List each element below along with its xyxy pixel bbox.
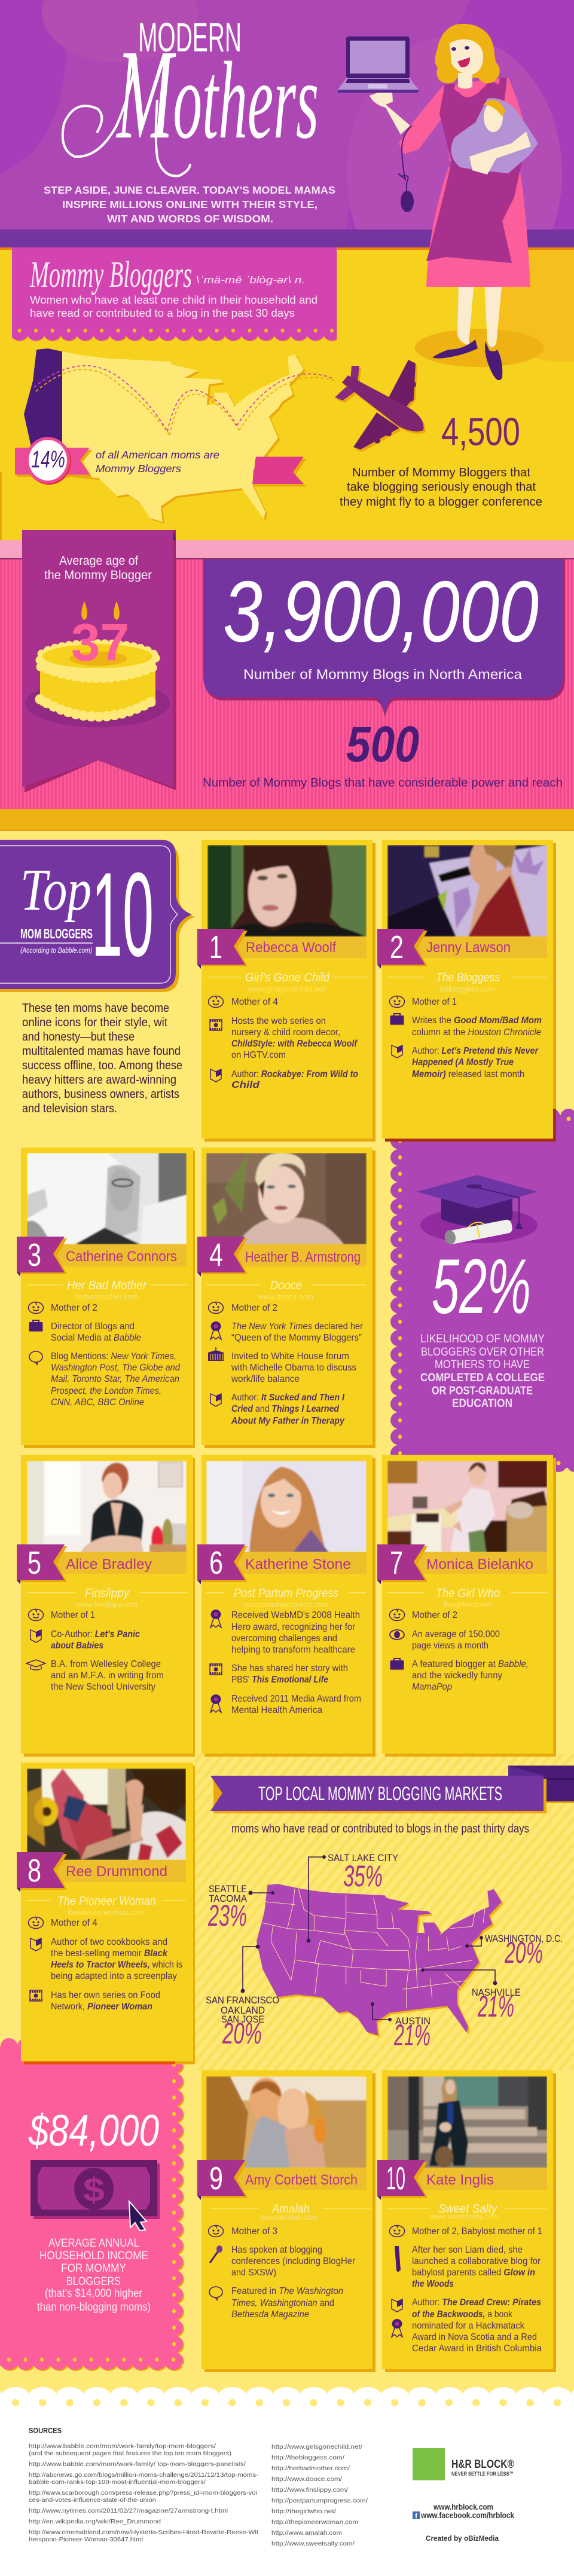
card 2: Jenny Lawson: Mother of 1 bbox=[412, 997, 457, 1007]
sources column right: http://thepioneerwoman.com bbox=[271, 2519, 358, 2526]
tagline: STEP ASIDE, JUNE CLEAVER. TODAY'S MODEL MAMAS bbox=[44, 184, 335, 196]
white footer with scalloped edge bbox=[0, 2385, 574, 2576]
cake with 37 bbox=[25, 601, 170, 727]
title: Modern Mothers bbox=[63, 14, 319, 176]
card 6: Katherine Stone: Katherine Stone bbox=[245, 1556, 351, 1572]
card 9: Amy Corbett Storch: conferences (including BlogHer bbox=[231, 2256, 355, 2266]
market: San Francisco Oakland San Jose: OAKLAND bbox=[221, 2005, 265, 2016]
card 6: Katherine Stone: overcoming challenges and bbox=[231, 1633, 337, 1644]
market: Washington D.C. bbox=[465, 1933, 563, 1969]
sources column right: http://www.girlsgonechild.net/ bbox=[271, 2443, 362, 2450]
market: Austin: AUSTIN bbox=[395, 2015, 430, 2027]
card 5: Alice Bradley: Finslippy bbox=[85, 1587, 130, 1600]
intro paragraph: and television stars. bbox=[22, 1102, 117, 1115]
intro paragraph: online icons for their style, wit bbox=[22, 1016, 167, 1029]
market: San Francisco Oakland San Jose bbox=[206, 1945, 279, 2050]
bookmark: average age: Average age of bbox=[59, 554, 138, 568]
definition panel: Mommy Bloggers: \ˈmä-mē ˈblȯg-ər\ n. bbox=[196, 274, 305, 286]
card 10: Kate Inglis: Award in Nova Scotia and a Red bbox=[412, 2332, 537, 2342]
photo: Alice Bradley bbox=[27, 1461, 187, 1552]
speech bubble: 3,900,000 bbox=[203, 559, 565, 717]
card 8: Ree Drummond: the best-selling memoir Black bbox=[51, 1948, 168, 1959]
market: San Francisco Oakland San Jose: 20% bbox=[222, 2017, 262, 2050]
callout: 14 percent: 14% bbox=[31, 446, 65, 473]
sources column left: herspoon-Pioneer-Woman-30647.html bbox=[29, 2536, 143, 2543]
card 1: Rebecca Woolf: Hosts the web series on bbox=[231, 1016, 326, 1026]
photo: Jenny Lawson bbox=[387, 845, 547, 937]
market: Salt Lake City bbox=[306, 1852, 398, 1942]
photo: Rebecca Woolf bbox=[207, 845, 367, 937]
card 2: Jenny Lawson: thebloggess.com bbox=[439, 984, 495, 993]
card 6: Katherine Stone: helping to transform healthcare bbox=[231, 1645, 355, 1655]
card 4: Heather B. Armstrong bbox=[197, 1148, 375, 1448]
card 8: Ree Drummond: 8 bbox=[28, 1853, 41, 1889]
card 6: Katherine Stone bbox=[197, 1455, 375, 1757]
card 8: Ree Drummond: Has her own series on Food bbox=[51, 1990, 160, 2000]
footer links: Created by oBizMedia bbox=[426, 2534, 499, 2543]
icon: graduation cap bbox=[417, 1175, 538, 1246]
card 1: Rebecca Woolf: Girl's Gone Child bbox=[245, 971, 330, 984]
title: Modern Mothers: MODERN bbox=[138, 14, 242, 60]
card 10: Kate Inglis: Author: The Dread Crew: Pirates bbox=[412, 2297, 541, 2308]
card 7: Monica Bielanko: Mother of 2 bbox=[412, 1610, 457, 1620]
yellow section background bbox=[0, 247, 574, 540]
card 10: Kate Inglis: nominated for a Hackmatack bbox=[412, 2321, 524, 2331]
footer links: www.hrblock.com bbox=[433, 2502, 493, 2511]
card 1: Rebecca Woolf: www.girlsgonechild.net bbox=[248, 984, 325, 993]
card 8: Ree Drummond: thepioneerwoman.com bbox=[68, 1908, 145, 1917]
card 8: Ree Drummond: The Pioneer Woman bbox=[57, 1895, 156, 1908]
footer links bbox=[413, 2502, 514, 2543]
sources column right: http://postpartumprogress.com/ bbox=[271, 2497, 368, 2504]
sources column left: (and the subsequent pages that features the top ten mom bloggers) bbox=[29, 2450, 231, 2457]
sources column left: http://abcnews.go.com/blogs/million-moms-challenge/2011/12/13/top-moms- bbox=[29, 2471, 259, 2479]
logo: H&R Block bbox=[413, 2448, 514, 2480]
logo: H&R Block: H&R BLOCK® bbox=[451, 2458, 514, 2471]
card 4: Heather B. Armstrong: About My Father in Therapy bbox=[231, 1416, 345, 1426]
card 5: Alice Bradley: and an M.F.A. in writing from bbox=[51, 1671, 164, 1681]
bookmark: average age bbox=[22, 530, 176, 793]
card 7: Monica Bielanko bbox=[377, 1455, 556, 1757]
card 10: Kate Inglis: Mother of 2, Babylost mother of 1 bbox=[412, 2226, 542, 2237]
stat: 4,500: take blogging seriously enough that bbox=[347, 480, 536, 494]
card 3: Catherine Connors: Catherine Connors bbox=[66, 1249, 177, 1265]
market: Seattle Tacoma: SEATTLE bbox=[209, 1883, 247, 1895]
card 7: Monica Bielanko: 7 bbox=[390, 1545, 403, 1581]
sources column right: http://www.sweetsalty.com/ bbox=[271, 2540, 355, 2547]
intro paragraph: success offline, too. Among these bbox=[22, 1059, 182, 1072]
market: Nashville: 21% bbox=[477, 1990, 514, 2023]
map: top local markets bbox=[257, 1884, 503, 2037]
top 10 panel: Top bbox=[20, 856, 91, 923]
panel: 52 percent: EDUCATION bbox=[452, 1397, 512, 1410]
card 6: Katherine Stone: Post Partum Progress bbox=[234, 1587, 338, 1600]
card 4: Heather B. Armstrong: with Michelle Obama to discuss bbox=[231, 1363, 356, 1373]
card 9: Amy Corbett Storch: Has spoken at blogging bbox=[231, 2245, 322, 2255]
panel: 52 percent: OR POST-GRADUATE bbox=[432, 1385, 533, 1397]
card 2: Jenny Lawson: Jenny Lawson bbox=[426, 940, 511, 956]
hero panel bbox=[0, 0, 574, 311]
card 8: Ree Drummond: Network, Pioneer Woman bbox=[51, 2002, 152, 2012]
card 10: Kate Inglis bbox=[377, 2070, 556, 2372]
pink panel: household income: $84,000 bbox=[28, 2106, 159, 2155]
top 10 panel: 10 bbox=[91, 848, 154, 981]
card 5: Alice Bradley: B.A. from Wellesley College bbox=[51, 1659, 161, 1669]
photo: Monica Bielanko bbox=[387, 1461, 547, 1552]
market: San Francisco Oakland San Jose: SAN JOSE bbox=[221, 2014, 264, 2025]
card 4: Heather B. Armstrong: work/life balance bbox=[231, 1374, 300, 1384]
panel: 52 percent: BLOGGERS OVER OTHER bbox=[421, 1346, 544, 1359]
market: Seattle Tacoma: 23% bbox=[207, 1899, 247, 1932]
card 8: Ree Drummond: Author of two cookbooks and bbox=[51, 1937, 167, 1947]
card 4: Heather B. Armstrong: Invited to White House forum bbox=[231, 1351, 349, 1362]
market: Austin bbox=[371, 2002, 430, 2052]
card 5: Alice Bradley bbox=[17, 1455, 195, 1757]
banner: top local markets bbox=[210, 1766, 574, 1813]
stat: 4,500 bbox=[340, 409, 542, 509]
card 8: Ree Drummond: Heels to Tractor Wheels, which is bbox=[51, 1960, 182, 1970]
panel: 52 percent: MOTHERS TO HAVE bbox=[435, 1359, 530, 1371]
card 6: Katherine Stone: Received 2011 Media Award from bbox=[231, 1694, 361, 1704]
icon: dollar bill with cursor bbox=[30, 2160, 160, 2231]
card 6: Katherine Stone: PBS' This Emotional Life bbox=[231, 1675, 328, 1685]
card 1: Rebecca Woolf: nursery & child room decor, bbox=[231, 1027, 340, 1038]
pink panel: household income: FOR MOMMY bbox=[61, 2262, 126, 2275]
market: Salt Lake City: 35% bbox=[343, 1859, 383, 1893]
card 7: Monica Bielanko: and the wickedly funny bbox=[412, 1671, 502, 1681]
sources column left: http://www.babble.com/mom/work-family/ top-mom-bloggers-panelists/ bbox=[29, 2461, 246, 2468]
photo: Katherine Stone bbox=[206, 1461, 367, 1552]
card 9: Amy Corbett Storch: Amy Corbett Storch bbox=[245, 2172, 358, 2188]
card 9: Amy Corbett Storch: and SXSW) bbox=[231, 2268, 276, 2278]
title: Modern Mothers: Mothers bbox=[115, 23, 319, 166]
icon: airplane bbox=[335, 360, 425, 452]
card 6: Katherine Stone: 6 bbox=[209, 1545, 223, 1581]
card 2: Jenny Lawson: 2 bbox=[390, 929, 404, 965]
card 8: Ree Drummond: Mother of 4 bbox=[51, 1918, 97, 1928]
intro paragraph: heavy hitters are award-winning bbox=[22, 1073, 176, 1087]
photo: Catherine Connors bbox=[27, 1153, 187, 1244]
card 6: Katherine Stone: postpartumprogress.com bbox=[244, 1600, 328, 1609]
top 10 panel bbox=[0, 840, 195, 992]
intro paragraph: and honesty—but these bbox=[22, 1030, 135, 1044]
card 10: Kate Inglis: www.sweetsalty.com bbox=[429, 2212, 499, 2221]
card 7: Monica Bielanko: Monica Bielanko bbox=[426, 1556, 533, 1572]
card 4: Heather B. Armstrong: Cried and Things I Learned bbox=[231, 1404, 339, 1414]
sources column right: http://herbadmother.com/ bbox=[271, 2465, 350, 2472]
card 3: Catherine Connors: Blog Mentions: New York Times, bbox=[51, 1351, 176, 1362]
card 9: Amy Corbett Storch: Mother of 3 bbox=[231, 2226, 277, 2237]
card 6: Katherine Stone: Mental Health America bbox=[231, 1705, 322, 1715]
ribbon right bbox=[252, 457, 306, 487]
card 7: Monica Bielanko: thegirlwho.net bbox=[444, 1600, 491, 1609]
card 5: Alice Bradley: Co-Author: Let's Panic bbox=[51, 1629, 140, 1639]
card 7: Monica Bielanko: An average of 150,000 bbox=[412, 1629, 500, 1639]
card 1: Rebecca Woolf: Rebecca Woolf bbox=[246, 940, 336, 956]
card 9: Amy Corbett Storch: Amalah bbox=[271, 2202, 310, 2216]
cake with 37: 37 bbox=[71, 613, 129, 672]
definition panel: Mommy Bloggers: have read or contributed to a blog in the past 30 days bbox=[30, 307, 295, 319]
card 2: Jenny Lawson: column at the Houston Chronicle bbox=[412, 1027, 541, 1038]
sources column right: http://thegirlwho.net/ bbox=[271, 2508, 336, 2515]
card 6: Katherine Stone: Hero award, recognizing her for bbox=[231, 1622, 355, 1632]
stat: 500: 500 bbox=[346, 716, 419, 772]
illustration: mother with laptop and baby bbox=[338, 24, 538, 380]
stat: 4,500: they might fly to a blogger conference bbox=[340, 495, 542, 509]
definition panel: Mommy Bloggers: Women who have at least one child in their household and bbox=[30, 294, 317, 306]
card 10: Kate Inglis: launched a collaborative blog for bbox=[412, 2256, 541, 2266]
card 7: Monica Bielanko: MamaPop bbox=[412, 1682, 452, 1692]
card 8: Ree Drummond: Ree Drummond bbox=[66, 1864, 167, 1880]
card 5: Alice Bradley: Mother of 1 bbox=[51, 1610, 95, 1620]
card 3: Catherine Connors: CNN, ABC, BBC Online bbox=[51, 1397, 144, 1408]
card 3: Catherine Connors: herbadmother.com bbox=[74, 1292, 138, 1301]
sources column left: babble-com-ranks-top-100-most-influential-mom-bloggers/ bbox=[29, 2479, 206, 2486]
card 1: Rebecca Woolf: Author: Rockabye: From Wild to bbox=[231, 1069, 358, 1079]
tagline: INSPIRE MILLIONS ONLINE WITH THEIR STYLE, bbox=[62, 198, 317, 210]
card 10: Kate Inglis: Sweet Salty bbox=[438, 2202, 497, 2216]
card 3: Catherine Connors: Her Bad Mother bbox=[67, 1279, 147, 1292]
card 1: Rebecca Woolf: on HGTV.com bbox=[231, 1050, 286, 1060]
footer links: f bbox=[415, 2512, 418, 2520]
card 8: Ree Drummond bbox=[17, 1763, 195, 2064]
definition panel: Mommy Bloggers bbox=[12, 247, 337, 341]
card 4: Heather B. Armstrong: Author: It Sucked and Then I bbox=[231, 1393, 345, 1403]
photo: Amy Corbett Storch bbox=[206, 2076, 367, 2168]
card 2: Jenny Lawson: Author: Let's Pretend this Never bbox=[412, 1046, 539, 1056]
card 7: Monica Bielanko: page views a month bbox=[412, 1641, 488, 1651]
card 10: Kate Inglis: Cedar Award in British Columbia bbox=[412, 2344, 542, 2354]
card 4: Heather B. Armstrong: “Queen of the Mommy Bloggers” bbox=[231, 1333, 362, 1343]
subtitle: markets: moms who have read or contributed to blogs in the past thirty days bbox=[231, 1822, 529, 1835]
icon: dollar bill with cursor: $ bbox=[83, 2171, 105, 2208]
card 10: Kate Inglis: babylost parents called Glow in bbox=[412, 2268, 535, 2278]
card 9: Amy Corbett Storch: www.amalah.com bbox=[259, 2213, 317, 2222]
photo: Kate Inglis bbox=[387, 2076, 547, 2168]
flight path bbox=[34, 366, 335, 435]
market: Nashville bbox=[421, 1968, 521, 2023]
card 10: Kate Inglis: Kate Inglis bbox=[426, 2172, 494, 2188]
sources column left: ces-and-votes-influence-state-of-the-union bbox=[29, 2497, 156, 2504]
card 2: Jenny Lawson: The Bloggess bbox=[436, 971, 500, 984]
card 1: Rebecca Woolf: 1 bbox=[209, 929, 222, 965]
card 6: Katherine Stone: Received WebMD's 2008 Health bbox=[231, 1610, 360, 1620]
stat: 4,500: 4,500 bbox=[441, 409, 520, 454]
definition panel: Mommy Bloggers: Mommy Bloggers bbox=[29, 255, 192, 295]
intro paragraph: These ten moms have become bbox=[22, 1002, 169, 1015]
card 3: Catherine Connors: Social Media at Babble bbox=[51, 1333, 141, 1343]
card 9: Amy Corbett Storch bbox=[197, 2070, 375, 2372]
card 5: Alice Bradley: Alice Bradley bbox=[66, 1556, 152, 1572]
sources column right: http://www.amalah.com bbox=[271, 2529, 342, 2537]
card 1: Rebecca Woolf bbox=[197, 840, 375, 1142]
sources column left: http://en.wikipedia.org/wiki/Ree_Drummond bbox=[29, 2518, 161, 2525]
sources heading: SOURCES bbox=[29, 2426, 62, 2435]
card 10: Kate Inglis: After her son Liam died, she bbox=[412, 2245, 523, 2255]
card 6: Katherine Stone: She has shared her story with bbox=[231, 1663, 348, 1674]
intro paragraph bbox=[22, 1002, 182, 1115]
tagline: WIT AND WORDS OF WISDOM. bbox=[107, 213, 273, 225]
card 1: Rebecca Woolf: Mother of 4 bbox=[231, 997, 278, 1007]
panel: 52 percent: LIKELIHOOD OF MOMMY bbox=[420, 1333, 545, 1345]
card 2: Jenny Lawson: Writes the Good Mom/Bad Mom bbox=[412, 1015, 542, 1026]
card 7: Monica Bielanko: A featured blogger at Babble, bbox=[412, 1659, 529, 1669]
card 3: Catherine Connors: 3 bbox=[28, 1237, 41, 1273]
card 2: Jenny Lawson bbox=[377, 840, 556, 1142]
card 10: Kate Inglis: the Woods bbox=[412, 2279, 454, 2289]
market: Seattle Tacoma bbox=[207, 1883, 274, 1932]
sources column right: http://thebloggess.com/ bbox=[271, 2454, 344, 2461]
top 10 panel: MOM BLOGGERS bbox=[20, 926, 93, 941]
tagline bbox=[44, 184, 335, 225]
card 2: Jenny Lawson: Memoir) released last month bbox=[412, 1069, 524, 1079]
card 7: Monica Bielanko: The Girl Who bbox=[436, 1587, 500, 1600]
card 9: Amy Corbett Storch: 9 bbox=[209, 2161, 223, 2196]
card 3: Catherine Connors: Washington Post, The Globe and bbox=[51, 1363, 181, 1373]
photo: Ree Drummond bbox=[27, 1769, 186, 1860]
card 8: Ree Drummond: being adapted into a screenplay bbox=[51, 1971, 177, 1981]
callout: 14 percent: of all American moms are bbox=[96, 449, 219, 461]
bookmark: average age: the Mommy Blogger bbox=[44, 568, 152, 582]
sources column left: http://www.nytimes.com/2011/02/27/magazine/27armstrong-t.html bbox=[29, 2507, 228, 2514]
card 1: Rebecca Woolf: ChildStyle: with Rebecca Woolf bbox=[231, 1039, 358, 1049]
intro paragraph: authors, business owners, artists bbox=[22, 1088, 179, 1101]
market: Seattle Tacoma: TACOMA bbox=[209, 1893, 248, 1904]
card 9: Amy Corbett Storch: Featured in The Washington bbox=[231, 2286, 343, 2296]
top 10 panel: (According to Babble.com) bbox=[20, 947, 92, 954]
card 4: Heather B. Armstrong: www.dooce.com bbox=[258, 1292, 313, 1301]
pink panel: household income: HOUSEHOLD INCOME bbox=[39, 2250, 148, 2262]
sources column right bbox=[271, 2443, 368, 2547]
market: Nashville: NASHVILLE bbox=[472, 1987, 521, 1998]
pink striped band bbox=[0, 540, 574, 831]
footer links: www.facebook.com/hrblock bbox=[420, 2511, 514, 2520]
card 3: Catherine Connors: Mail, Toronto Star, The American bbox=[51, 1374, 179, 1384]
pink panel: household income: (that's $14,000 higher bbox=[45, 2287, 143, 2300]
card 4: Heather B. Armstrong: Dooce bbox=[270, 1279, 302, 1292]
market: Washington D.C.: 20% bbox=[504, 1936, 543, 1969]
card 2: Jenny Lawson: Happened (A Mostly True bbox=[412, 1057, 514, 1067]
card 5: Alice Bradley: www.finslippy.com bbox=[75, 1600, 138, 1609]
stat: 500 bbox=[203, 716, 563, 790]
card 5: Alice Bradley: 5 bbox=[28, 1545, 41, 1581]
panel: 52 percent bbox=[390, 1109, 574, 1472]
speech bubble: 3,900,000: Number of Mommy Blogs in North America bbox=[243, 666, 522, 682]
sources column left: http://www.cinemablend.com/new/Hysteria-Scribes-Hired-Rewrite-Reese-Wit bbox=[29, 2529, 258, 2536]
sources column left bbox=[29, 2443, 259, 2543]
sources column right: http://www.finslippy.com/ bbox=[271, 2486, 348, 2494]
card 4: Heather B. Armstrong: Heather B. Armstrong bbox=[245, 1249, 361, 1265]
card 9: Amy Corbett Storch: Bethesda Magazine bbox=[231, 2309, 309, 2320]
market: Austin: 21% bbox=[393, 2018, 430, 2052]
intro paragraph: multitalented mamas have found bbox=[22, 1045, 181, 1058]
logo: H&R Block: NEVER SETTLE FOR LESS™ bbox=[451, 2471, 514, 2477]
sources column left: http://www.babble.com/mom/work-family/top-mom-bloggers/ bbox=[29, 2443, 216, 2450]
card 9: Amy Corbett Storch: Times, Washingtonian and bbox=[231, 2298, 334, 2308]
panel: 52 percent: COMPLETED A COLLEGE bbox=[420, 1372, 545, 1384]
stat: 500: Number of Mommy Blogs that have considerable power and reach bbox=[203, 776, 563, 790]
card 4: Heather B. Armstrong: The New York Times declared her bbox=[231, 1321, 363, 1332]
market: San Francisco Oakland San Jose: SAN FRANCISCO bbox=[206, 1994, 279, 2006]
market: Salt Lake City: SALT LAKE CITY bbox=[328, 1852, 398, 1864]
card 1: Rebecca Woolf: Child bbox=[231, 1080, 260, 1090]
card 3: Catherine Connors bbox=[17, 1148, 195, 1448]
card 5: Alice Bradley: the New School University bbox=[51, 1682, 155, 1692]
diagonal striped markets background bbox=[195, 1754, 574, 2070]
callout: 14 percent: Mommy Bloggers bbox=[96, 463, 181, 475]
pink panel: household income bbox=[0, 2038, 184, 2370]
card 4: Heather B. Armstrong: Mother of 2 bbox=[231, 1303, 277, 1313]
sources column left: http://www.scarborough.com/press-release.php?press_id=mom-bloggers-voi bbox=[29, 2489, 257, 2497]
pink panel: household income: than non-blogging moms) bbox=[37, 2301, 151, 2314]
card 3: Catherine Connors: Director of Blogs and bbox=[51, 1321, 135, 1332]
photo: Heather B. Armstrong bbox=[206, 1153, 367, 1244]
card 4: Heather B. Armstrong: 4 bbox=[209, 1237, 223, 1273]
stat: 4,500: Number of Mommy Bloggers that bbox=[352, 466, 530, 479]
callout: 14 percent bbox=[15, 437, 219, 485]
card 10: Kate Inglis: 10 bbox=[386, 2161, 405, 2196]
card 10: Kate Inglis: of the Backwoods, a book bbox=[412, 2309, 512, 2320]
card 3: Catherine Connors: Mother of 2 bbox=[51, 1303, 97, 1313]
pink panel: household income: AVERAGE ANNUAL bbox=[48, 2237, 139, 2250]
card 3: Catherine Connors: Prospect, the London Times, bbox=[51, 1386, 161, 1396]
card 5: Alice Bradley: about Babies bbox=[51, 1641, 103, 1651]
sources column right: http://www.dooce.com/ bbox=[271, 2476, 342, 2483]
pink panel: household income: BLOGGERS bbox=[66, 2275, 121, 2288]
map: America with 14% bbox=[24, 348, 335, 524]
